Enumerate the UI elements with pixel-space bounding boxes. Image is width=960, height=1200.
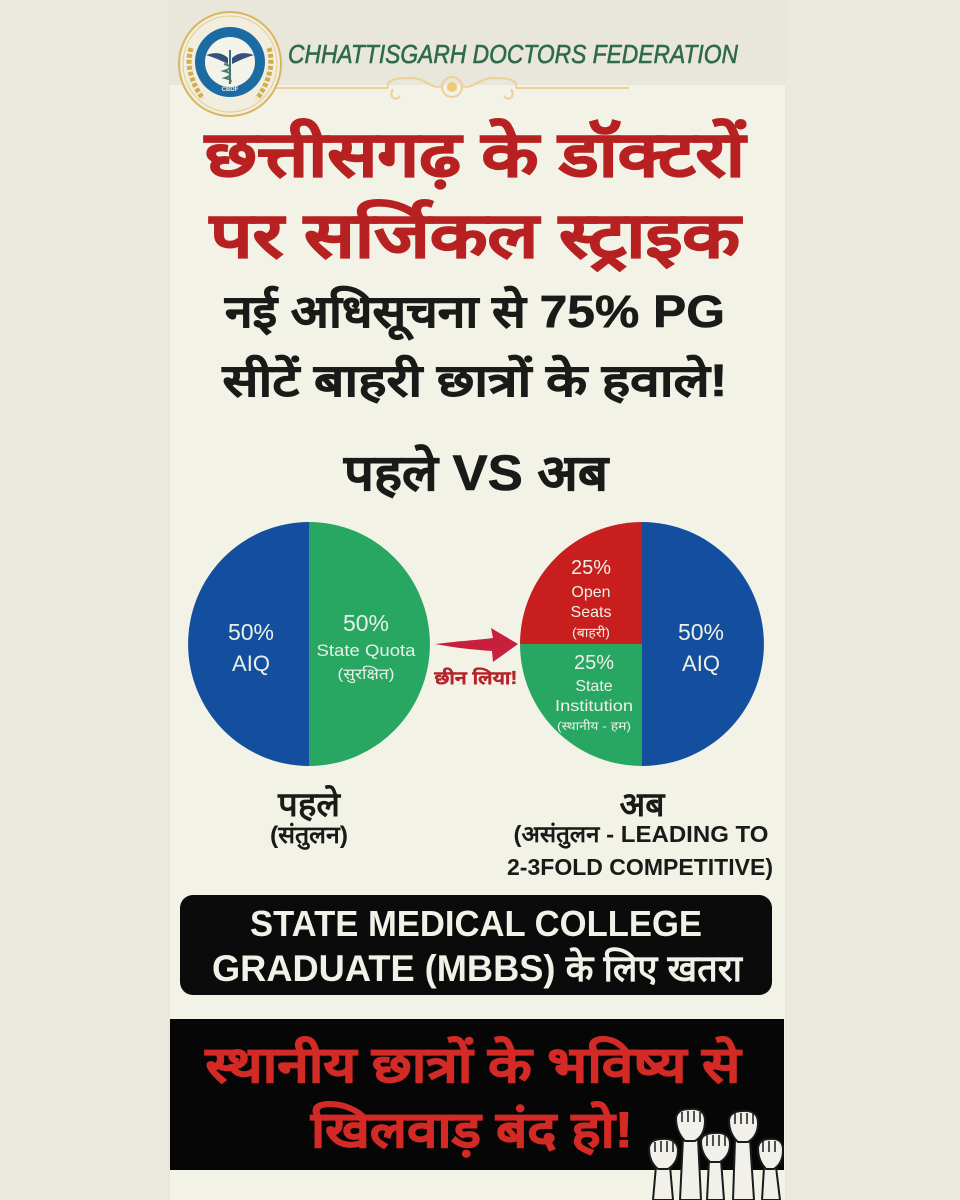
- banner: stop playing with students' future: खिलवाड़ बंद हो!: [310, 1101, 633, 1158]
- title: [204, 118, 748, 272]
- chart: now pie: 25%: [571, 557, 611, 579]
- ornament: gold divider: [276, 77, 629, 99]
- banner: stop playing with students' future: स्थानीय छात्रों के भविष्य से: [204, 1036, 743, 1093]
- label: now caption: (असंतुलन - LEADING TO: [514, 821, 768, 849]
- icon: federation logo: [179, 12, 281, 116]
- heading: organisation name: CHHATTISGARH DOCTORS FEDERATION: [288, 39, 738, 69]
- banner: stop playing with students' future: [170, 1019, 784, 1170]
- chart: now pie: 25%: [574, 652, 614, 674]
- chart: before pie: (सुरक्षित): [338, 665, 394, 684]
- chart: before pie: AIQ: [232, 651, 270, 676]
- chart: before pie: 50%: [228, 619, 274, 645]
- icon: raised fists: [649, 1109, 783, 1200]
- banner: threat to graduates: GRADUATE (MBBS) के लिए खतरा: [212, 947, 743, 989]
- subtitle: सीटें बाहरी छात्रों के हवाले!: [221, 354, 728, 406]
- arrow: taken away: [435, 628, 518, 662]
- heading: before vs now: पहले VS अब: [343, 444, 611, 501]
- chart: before pie: 50%: [343, 610, 389, 636]
- label: before caption: (संतुलन): [270, 822, 348, 850]
- chart: now pie: [520, 522, 764, 766]
- chart: now pie: Institution: [555, 698, 633, 715]
- chart: now pie: State: [575, 678, 613, 695]
- label: now caption: [507, 786, 773, 880]
- chart: now pie: (बाहरी): [572, 625, 610, 640]
- label: before caption: [270, 784, 348, 850]
- chart: now pie: Open: [571, 584, 611, 601]
- label: now caption: 2-3FOLD COMPETITIVE): [507, 854, 773, 880]
- label: now caption: अब: [620, 786, 666, 824]
- icon: federation logo: CBDF: [222, 87, 239, 93]
- label: before caption: पहले: [277, 784, 342, 824]
- chart: now pie: AIQ: [682, 651, 720, 676]
- chart: now pie: (स्थानीय - हम): [557, 719, 631, 733]
- subtitle: नई अधिसूचना से 75% PG: [224, 285, 725, 341]
- banner: threat to graduates: [180, 895, 772, 995]
- chart: before pie: [188, 522, 430, 766]
- subtitle: [221, 285, 728, 406]
- title: छत्तीसगढ़ के डॉक्टरों: [204, 118, 748, 190]
- chart: before pie: State Quota: [316, 641, 416, 660]
- banner: threat to graduates: STATE MEDICAL COLLEGE: [250, 903, 702, 944]
- chart: now pie: 50%: [678, 619, 724, 645]
- panel: poster background: [170, 85, 785, 1200]
- chart: now pie: Seats: [571, 604, 611, 621]
- title: पर सर्जिकल स्ट्राइक: [209, 199, 743, 272]
- label: taken away: छीन लिया!: [433, 667, 518, 688]
